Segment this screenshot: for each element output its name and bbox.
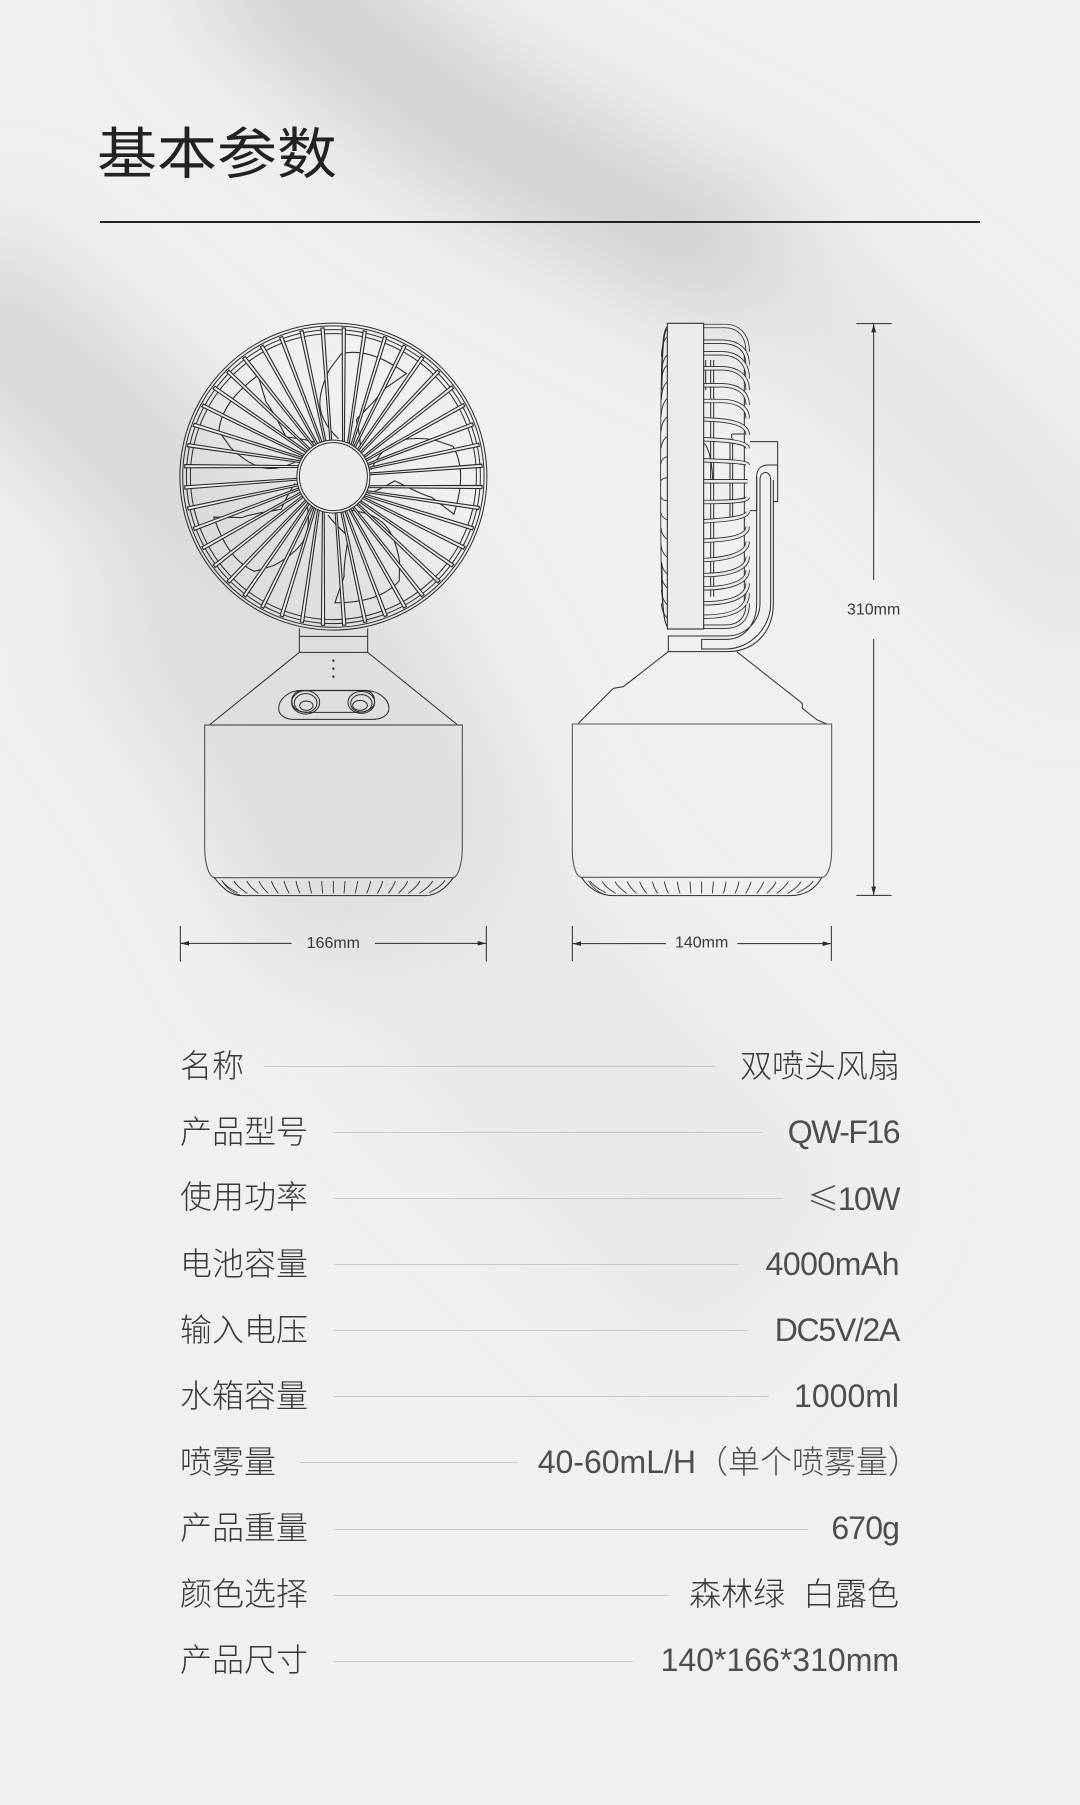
width dimension 140mm	[572, 926, 831, 961]
front view of fan	[180, 323, 487, 962]
spec row: model: QW-F16	[788, 1114, 899, 1150]
spec row: colour	[180, 1576, 899, 1612]
water tank body	[205, 725, 462, 878]
spec row: size: 产品尺寸	[180, 1642, 308, 1678]
spec row: tank: 1000ml	[794, 1378, 899, 1414]
fan head with guard, blades and hub	[180, 323, 487, 630]
spec row: colour: 颜色选择	[180, 1576, 308, 1612]
spec row: mist: 40-60mL/H（单个喷雾量）	[538, 1444, 920, 1480]
spec row: battery: 电池容量	[180, 1246, 308, 1282]
spec row: size: 140*166*310mm	[661, 1642, 899, 1678]
spec row: model: 产品型号	[180, 1114, 308, 1150]
spec row: weight: 670g	[831, 1510, 899, 1546]
width dimension 166mm: 166mm	[307, 935, 360, 952]
spec row: name	[180, 1048, 900, 1084]
side base and water tank	[572, 652, 832, 896]
rear grille scallops	[661, 327, 667, 627]
spec row: weight: 产品重量	[180, 1510, 308, 1546]
height dimension 310mm: 310mm	[847, 601, 900, 618]
spec row: size	[180, 1642, 899, 1678]
width dimension 166mm	[180, 926, 486, 962]
spec row: tank: 水箱容量	[180, 1378, 308, 1414]
fan head side profile	[661, 323, 778, 652]
neck and base with buttons	[205, 628, 462, 896]
spec row: battery	[180, 1246, 899, 1282]
spec row: model	[180, 1114, 900, 1150]
spec row: name: 名称	[180, 1048, 244, 1084]
spec row: weight	[180, 1510, 899, 1546]
title: 基本参数	[97, 123, 337, 186]
spec row: power: 使用功率	[180, 1179, 308, 1215]
spec row: mist: 喷雾量	[180, 1444, 276, 1480]
height dimension 310mm	[847, 324, 900, 895]
spec row: tank	[180, 1378, 899, 1414]
spec row: input: 输入电压	[180, 1312, 308, 1348]
spec row: battery: 4000mAh	[766, 1246, 899, 1282]
spec row: power	[180, 1174, 900, 1220]
control panel buttons	[279, 690, 389, 719]
width dimension 140mm: 140mm	[675, 935, 728, 952]
spec row: input: DC5V/2A	[775, 1312, 899, 1348]
spec row: mist	[180, 1444, 920, 1480]
spec row: name: 双喷头风扇	[740, 1048, 900, 1084]
bracket and support arm	[750, 442, 778, 511]
spec row: colour: 森林绿 白露色	[689, 1576, 899, 1612]
spec row: input	[180, 1312, 900, 1348]
spec row: power: ≤10W	[807, 1174, 899, 1220]
side view of fan	[572, 323, 900, 961]
